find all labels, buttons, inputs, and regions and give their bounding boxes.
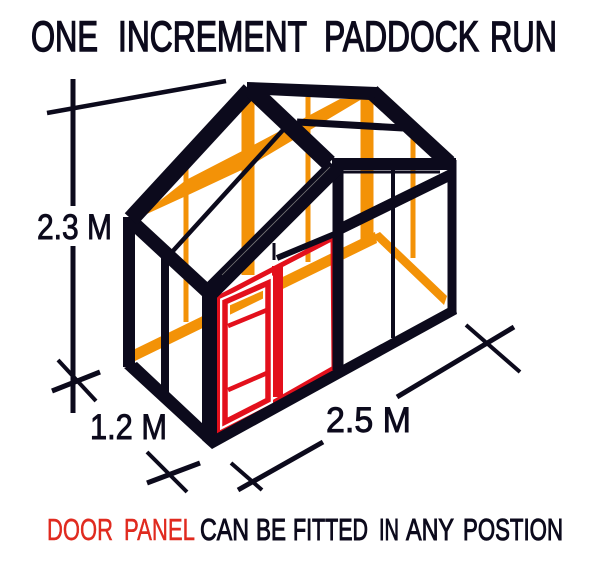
purlins — [297, 122, 403, 128]
title: RUN — [490, 13, 557, 61]
title: PADDOCK — [324, 13, 479, 61]
caption: can be fitted: CAN — [200, 512, 249, 547]
ridge beam — [247, 82, 377, 100]
caption: can be fitted: IN — [379, 512, 399, 547]
eave beam — [210, 167, 335, 292]
height dimension lines — [47, 79, 226, 413]
width label: 1.2 M — [90, 408, 167, 447]
side rail — [340, 175, 450, 229]
caption: door panel — [47, 512, 195, 547]
panel outer frame — [218, 238, 334, 434]
caption: door panel: PANEL — [124, 512, 195, 547]
caption: can be fitted — [200, 512, 563, 547]
length label: 2.5 M — [326, 401, 411, 440]
right posts — [332, 165, 344, 370]
door lower rail — [228, 373, 267, 390]
title: INCREMENT — [118, 13, 307, 61]
orange timber frame — [135, 95, 447, 361]
right base — [212, 304, 457, 449]
left roof edge — [131, 90, 250, 219]
height label: 2.3 M — [37, 208, 112, 247]
door leaf — [225, 283, 268, 422]
title — [31, 13, 557, 61]
door upper rail — [228, 310, 267, 326]
left base — [124, 362, 212, 449]
top beam — [332, 158, 456, 170]
apex to front gable — [252, 90, 329, 163]
caption: can be fitted: POSTION — [463, 512, 563, 547]
left thin post — [161, 250, 169, 397]
door outline gap — [225, 283, 268, 422]
title: ONE — [31, 13, 98, 61]
black steel frame — [129, 90, 456, 397]
red door panel — [218, 238, 334, 434]
right roof edge — [372, 92, 449, 163]
front corner post — [202, 287, 217, 449]
caption: can be fitted: BE — [256, 512, 286, 547]
gable lower edge — [129, 219, 209, 293]
panel mullion — [272, 266, 283, 397]
caption: can be fitted: FITTED — [293, 512, 368, 547]
caption: door panel: DOOR — [47, 512, 113, 547]
length dimension lines — [231, 325, 520, 490]
left corner post — [123, 217, 135, 367]
caption: can be fitted: ANY — [406, 512, 454, 547]
width dimension cross — [147, 452, 200, 492]
